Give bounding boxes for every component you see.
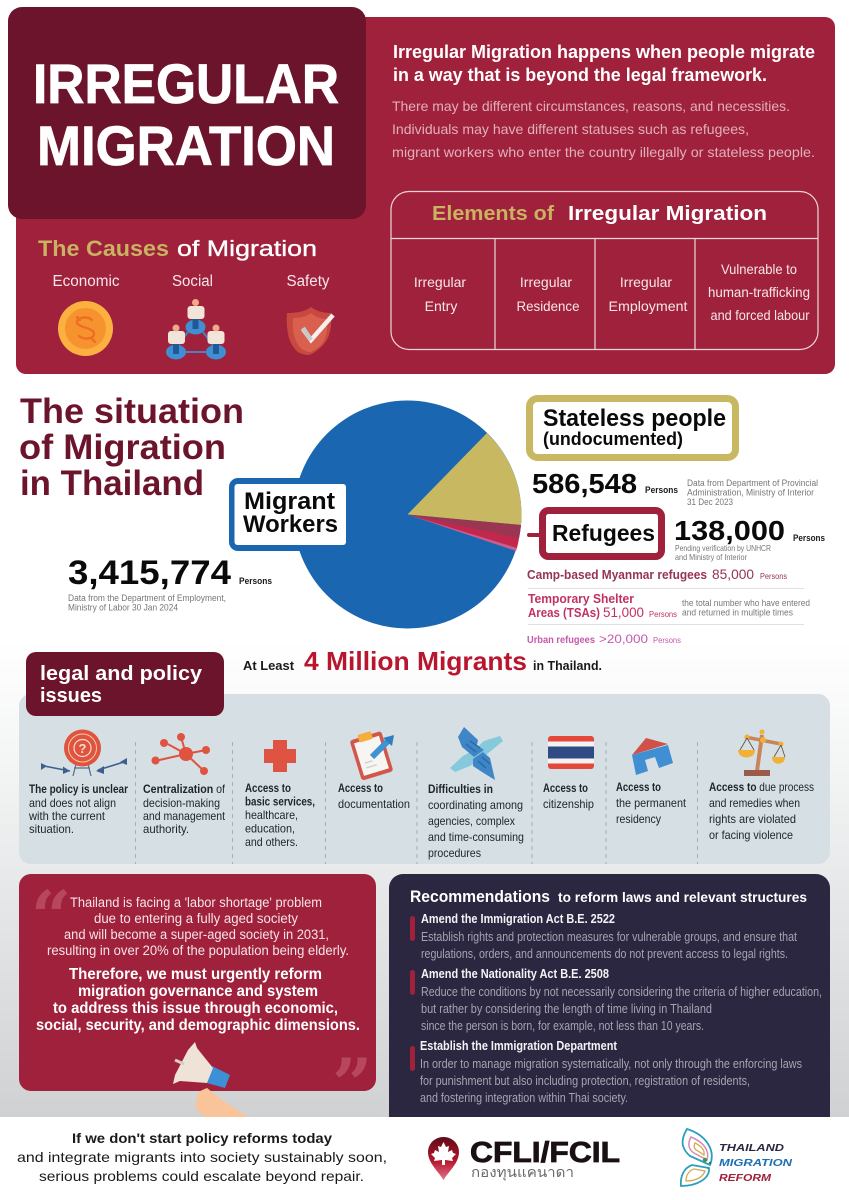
panel: legal and policy issues [19,694,830,864]
label: stateless people [530,398,736,458]
due process text: Access to due process [709,780,814,794]
element cells: Entry [425,298,457,314]
policy text: situation. [29,822,74,836]
logo: CFLI/FCIL [428,1137,620,1181]
temporary shelter areas: Persons [649,609,677,619]
refugees breakdown [527,566,810,646]
logo: Thailand Migration Reform: THAILAND [719,1142,784,1154]
elements heading [432,203,767,225]
cause labels: Social [172,273,213,290]
call to reform: to address this issue through economic, [53,1000,338,1017]
heading: situation of migration: in Thailand [20,464,204,503]
cause labels: Economic [52,273,120,290]
title [33,52,339,177]
element cells: Irregular [620,274,672,290]
centralization text: Centralization of [143,782,226,796]
elements heading: Elements of [432,203,554,225]
icon: safety shield [287,307,333,355]
coordination text: agencies, complex [428,814,515,828]
intro body text [392,98,815,160]
coordination text: Difficulties in [428,782,493,796]
recommendation 3: Establish the Immigration Department [420,1038,618,1053]
cause labels: Safety [286,273,330,290]
panel: title box [8,7,366,219]
logo: CFLI/FCIL: กองทุนแคนาดา [471,1164,574,1181]
policy text: with the current [28,809,106,823]
residency text: Access to [616,780,661,794]
headline: 4 million migrants [243,646,602,676]
stat: migrant workers count: 3,415,774 [68,554,231,592]
basic services text: basic services, [245,794,315,808]
icon: maple leaf pin [428,1137,459,1180]
intro heading [393,41,815,85]
label: stateless people: (undocumented) [543,429,683,449]
temporary shelter areas: 51,000 [603,604,644,620]
headline: 4 million migrants: in Thailand. [533,658,602,673]
icon: butterfly [681,1129,712,1186]
shelter note [682,598,810,618]
stat: migrant workers count: Data from the Department of Employment, [68,593,226,603]
policy text: and does not align [29,796,116,810]
documentation text [338,781,410,811]
footer message: If we don't start policy reforms today [72,1130,332,1146]
footer message [17,1130,387,1184]
basic services text: Access to [245,781,291,795]
stat: migrant workers count: Ministry of Labor 30 Jan 2024 [68,602,178,612]
call to reform [36,966,360,1034]
element cells: Irregular [414,274,466,290]
headline: 4 million migrants: At Least [243,658,295,673]
element cells [414,261,810,323]
heading: legal and policy issues: legal and policy [40,663,203,685]
footer message: and integrate migrants into society sustainably soon, [17,1149,387,1165]
centralization text: authority. [143,822,189,836]
title: MIGRATION [37,114,335,177]
element cells: Vulnerable to [721,261,797,277]
intro body text: migrant workers who enter the country illegally or stateless people. [392,144,815,160]
element cells: Employment [608,298,688,314]
title: IRREGULAR [33,52,339,115]
citizenship text: citizenship [543,797,594,811]
recommendations heading: to reform laws and relevant structures [558,889,807,905]
quote text: resulting in over 20% of the population being elderly. [47,943,349,958]
urban refugees: Urban refugees [527,634,595,646]
headline: 4 million migrants: 4 Million Migrants [304,646,527,676]
label: migrant workers [229,478,347,551]
icon: clipboard [349,728,394,781]
icon: target [41,730,127,776]
stat: migrant workers count: Persons [239,576,272,586]
heading: situation of migration: The situation [20,392,244,431]
intro heading: Irregular Migration happens when people migrate [393,41,815,62]
logo: Thailand Migration Reform [681,1129,792,1186]
element cells: Irregular [520,274,572,290]
recommendation 2 [410,966,822,1033]
due process text: or facing violence [709,828,793,842]
recommendation 2: since the person is born, for example, not less than 10 years. [421,1018,704,1033]
policy text: The policy is unclear [29,782,128,796]
shelter note: the total number who have entered [682,598,810,608]
icon: coin [58,301,113,356]
stat: stateless count: 31 Dec 2023 [687,497,733,507]
citizenship text: Access to [543,781,588,795]
basic services text: healthcare, [245,808,298,822]
quote text [47,895,349,958]
causes heading: of Migration [177,236,317,261]
footer message: serious problems could escalate beyond repair. [39,1168,364,1184]
due process text: and remedies when [709,796,800,810]
quote text: Thailand is facing a 'labor shortage' problem [70,895,322,910]
stat: refugees count: Pending verification by UNHCR [675,543,771,553]
recommendation 2: but rather by considering the length of time living in Thailand [421,1001,712,1016]
recommendation 2: Amend the Nationality Act B.E. 2508 [421,966,609,981]
panel: top introduction [16,17,835,374]
recommendations heading [410,887,807,906]
stat: stateless count: Persons [645,485,678,495]
call to reform: migration governance and system [78,983,318,1000]
coordination text: coordinating among [428,798,523,812]
logo: CFLI/FCIL: CFLI/FCIL [470,1137,620,1169]
icon: megaphone with hand [173,1042,248,1117]
residency text: residency [616,812,661,826]
temporary shelter areas: Areas (TSAs) [528,605,600,620]
heading: situation of migration: of Migration [19,428,226,467]
stat: stateless count: Data from Department of Provincial [687,478,818,488]
basic services text [245,781,315,849]
icon: house [632,738,673,775]
heading: situation of migration [19,392,244,503]
call to reform: social, security, and demographic dimensions. [36,1017,360,1034]
stat: stateless count [532,468,818,507]
cause labels [52,273,330,290]
stat: stateless count: Administration, Ministry of Interior [687,488,814,498]
causes heading [38,236,317,261]
due process text [709,780,814,842]
urban refugees: >20,000 [599,634,648,646]
camp-based refugees: Persons [760,571,787,581]
intro body text: Individuals may have different statuses such as refugees, [392,121,749,137]
label: refugees [527,510,662,556]
call to reform: Therefore, we must urgently reform [69,966,322,983]
quote text: and will become a super-aged society in 2031, [64,927,329,942]
urban refugees: Persons [653,635,681,645]
stat: refugees count: 138,000 [674,515,785,546]
icon: target: ? [79,741,87,756]
policy text [28,782,128,836]
recommendation 1 [410,911,797,961]
documentation text: Access to [338,781,383,795]
recommendation 3: and fostering integration within Thai society. [420,1090,628,1105]
centralization text: decision-making [143,796,220,810]
element cells: Residence [516,298,580,314]
recommendation 3 [410,1038,802,1105]
label: refugees: Refugees [552,520,655,546]
documentation text: documentation [338,797,410,811]
coordination text: and time-consuming [428,830,524,844]
due process text: rights are violated [709,812,796,826]
closing quote mark: ” [332,1043,372,1126]
urban refugees [527,634,681,646]
panel: labor shortage quote [19,874,376,1126]
label: migrant workers: Migrant [244,488,335,515]
icon: joined hands [450,727,503,780]
stat: refugees count [674,515,825,562]
opening quote mark: “ [31,875,71,958]
icon: thai flag [548,736,594,769]
citizenship text [543,781,594,811]
residency text: the permanent [616,796,687,810]
stat: stateless count: 586,548 [532,468,637,499]
intro heading: in a way that is beyond the legal framework. [393,64,767,85]
recommendation 3: for punishment but also including protection, registration of residents, [420,1073,750,1088]
coordination text [428,782,524,860]
camp-based refugees: Camp-based Myanmar refugees [527,567,707,582]
coordination text: procedures [428,846,481,860]
panel: elements of irregular migration [391,192,818,350]
basic services text: education, [245,822,295,836]
label: stateless people: Stateless people [543,405,726,432]
temporary shelter areas: Temporary Shelter [528,591,634,606]
stat: refugees count: and Ministry of Interior [675,552,747,562]
logo: Thailand Migration Reform: REFORM [719,1172,771,1184]
panel: recommendations [389,874,830,1117]
label: migrant workers: Workers [243,511,338,538]
causes heading: The Causes [38,236,169,261]
quote text: due to entering a fully aged society [94,911,298,926]
icon: network [152,733,210,775]
recommendation 1: Amend the Immigration Act B.E. 2522 [421,911,615,926]
stat: refugees count: Persons [793,533,825,543]
element cells: human-trafficking [708,284,810,300]
heading: legal and policy issues: issues [40,685,102,707]
elements heading: Irregular Migration [568,203,767,225]
basic services text: and others. [245,835,298,849]
icon: scales of justice [738,730,785,776]
stat: migrant workers count [68,554,272,612]
temporary shelter areas [528,591,677,620]
camp-based refugees: 85,000 [712,566,754,582]
recommendations heading: Recommendations [410,887,550,906]
shelter note: and returned in multiple times [682,608,793,618]
centralization text [143,782,226,836]
heading: legal and policy issues [26,652,224,716]
icon: social network [166,299,226,360]
intro body text: There may be different circumstances, reasons, and necessities. [392,98,790,114]
pie chart [294,400,522,628]
icon: medical cross [264,740,296,772]
residency text [616,780,687,826]
centralization text: and management [143,809,226,823]
element cells: and forced labour [710,307,810,323]
logo: Thailand Migration Reform: MIGRATION [719,1157,792,1169]
